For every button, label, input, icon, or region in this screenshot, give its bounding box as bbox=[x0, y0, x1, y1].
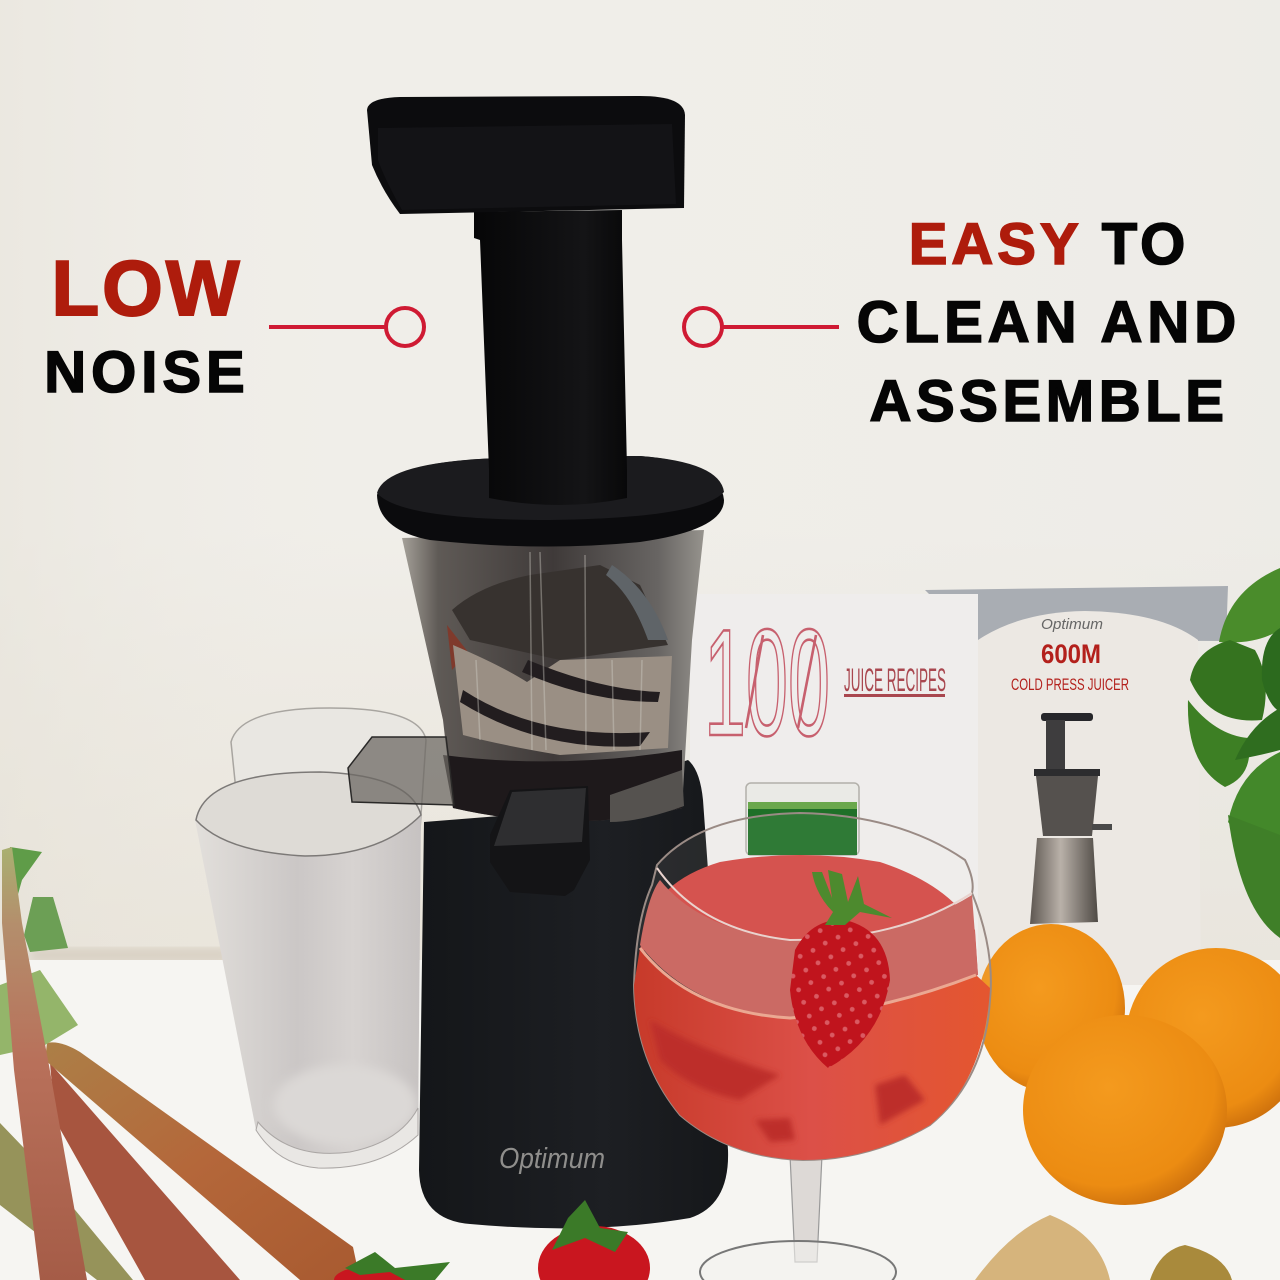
recipe booklet: JUICE RECIPES bbox=[844, 662, 946, 698]
front drinking cup bbox=[195, 772, 421, 1168]
rhubarb leaves bbox=[0, 847, 78, 1055]
juice level line bbox=[640, 948, 976, 1018]
basil leaves bbox=[1188, 568, 1280, 938]
back drinking cup bbox=[231, 708, 426, 830]
reflected band below the rim bbox=[640, 880, 978, 1018]
mini juicer picture bbox=[1030, 713, 1112, 924]
strawberry on table centre bbox=[538, 1200, 650, 1280]
oranges bbox=[977, 924, 1280, 1205]
feed chute tube bbox=[474, 210, 627, 505]
juicer lid bbox=[377, 456, 724, 547]
pulp outlet chute bbox=[348, 737, 454, 805]
physalis fruits bbox=[975, 1215, 1232, 1280]
juice bowl bbox=[402, 530, 704, 822]
juice spout bbox=[490, 786, 590, 896]
rhubarb stalks bbox=[0, 847, 360, 1280]
noise text: NOISE bbox=[44, 340, 250, 405]
dark juice patches bbox=[650, 1020, 925, 1142]
lower red juice bbox=[634, 948, 990, 1160]
pusher head bbox=[367, 96, 685, 214]
product leaflet bbox=[925, 586, 1228, 985]
strawberry garnish bbox=[790, 870, 892, 1068]
recipe booklet: 100 bbox=[704, 598, 830, 768]
glass foot bbox=[700, 1241, 896, 1280]
brand logo on base: Optimum bbox=[499, 1143, 605, 1175]
heading line 3: ASSEMBLE bbox=[869, 369, 1229, 434]
glass stem bbox=[790, 1155, 822, 1262]
balloon glass of red juice bbox=[634, 813, 991, 1280]
glass bowl bbox=[634, 813, 991, 1160]
connector line right bbox=[684, 308, 839, 346]
shot glass of green juice bbox=[746, 783, 859, 855]
heading line 2: CLEAN AND bbox=[857, 290, 1241, 355]
front rim line bbox=[657, 868, 972, 940]
callout: low noise bbox=[44, 244, 424, 405]
callout: easy to clean and assemble bbox=[684, 212, 1241, 434]
leaflet model name: 600M bbox=[1041, 639, 1101, 669]
juice surface bbox=[640, 855, 978, 975]
juicer motor base bbox=[419, 760, 728, 1228]
connector line left bbox=[269, 308, 424, 346]
slashes through the zeros bbox=[746, 635, 816, 728]
background wall bbox=[0, 0, 1280, 962]
leaflet brand: Optimum bbox=[1041, 616, 1103, 633]
countertop bbox=[0, 960, 1280, 1280]
recipe booklet bbox=[690, 594, 978, 984]
heading line 1: EASY TO bbox=[909, 212, 1189, 277]
juicer bbox=[348, 96, 728, 1228]
low text: LOW bbox=[52, 244, 242, 332]
leaflet subtitle: COLD PRESS JUICER bbox=[1011, 675, 1129, 694]
auger inside bowl bbox=[443, 552, 684, 822]
strawberry on table left bbox=[334, 1252, 450, 1280]
